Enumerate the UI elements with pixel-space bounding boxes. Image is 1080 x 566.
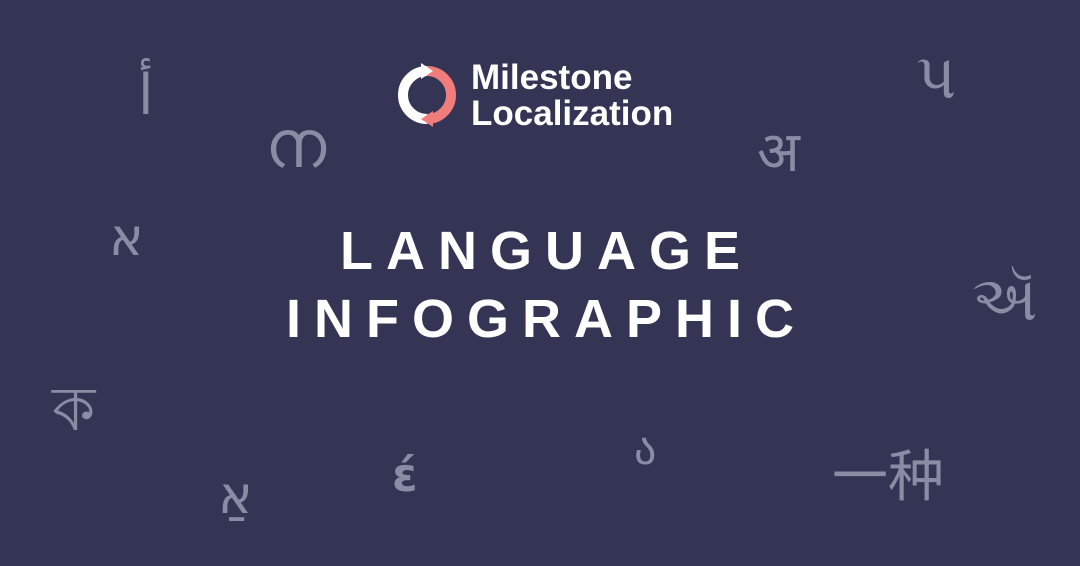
glyph: epsilon accent: ɛ́ [392,448,418,502]
glyph: arabic: أ [138,63,154,128]
glyph: gujarati: પ [916,40,956,113]
icon: circular arrows [398,63,456,127]
glyph: hebrew: א [109,208,144,268]
logo [398,58,673,133]
title: LANGUAGE [340,221,753,281]
glyph: chinese: 一种 [832,445,944,510]
glyph: small hook: ა [634,424,656,475]
logo text [471,58,673,133]
glyph: devanagari: अ [757,120,800,185]
logo text: Milestone [471,58,632,97]
glyph: bengali: ক [52,372,95,445]
glyph: malayalam: ന [265,106,326,183]
logo text: Localization [471,94,673,133]
glyph: hebrew with vowel: אַ [218,466,253,526]
glyph: gujarati pair: ઍ [972,262,1037,335]
subtitle: INFOGRAPHIC [286,289,807,349]
